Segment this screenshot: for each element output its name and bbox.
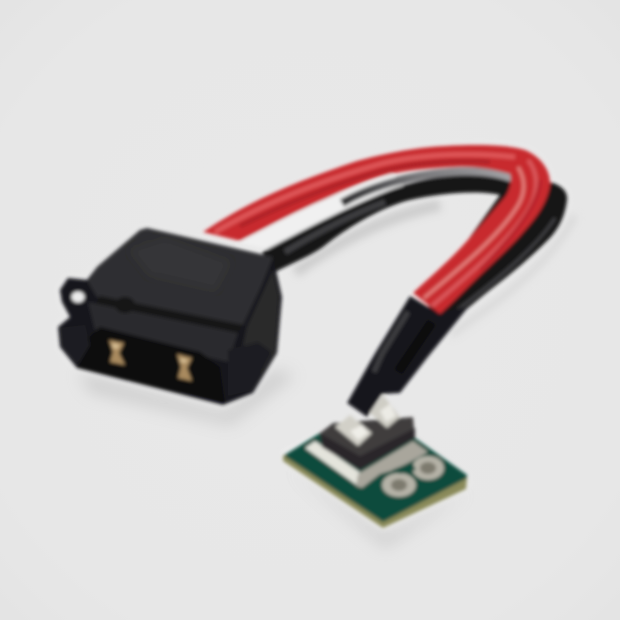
front band	[88, 302, 238, 362]
connector opening	[77, 327, 225, 403]
silver strip	[305, 441, 362, 486]
solder terminals	[335, 395, 400, 446]
heat shrink sleeves	[347, 296, 470, 417]
right side panel	[243, 270, 279, 390]
white gap between wires	[238, 174, 405, 250]
red wire	[203, 145, 550, 314]
side notches	[60, 325, 90, 365]
brass pins	[109, 340, 125, 365]
black wire	[262, 171, 567, 328]
top face	[88, 228, 273, 325]
light halo around product	[58, 145, 567, 528]
mounting loop	[60, 278, 92, 312]
circuit board	[283, 433, 467, 528]
metal tab and pads	[356, 441, 428, 488]
connector body	[58, 228, 282, 405]
soft shadows	[78, 205, 575, 548]
bump	[115, 297, 135, 313]
black block on board	[320, 417, 415, 470]
